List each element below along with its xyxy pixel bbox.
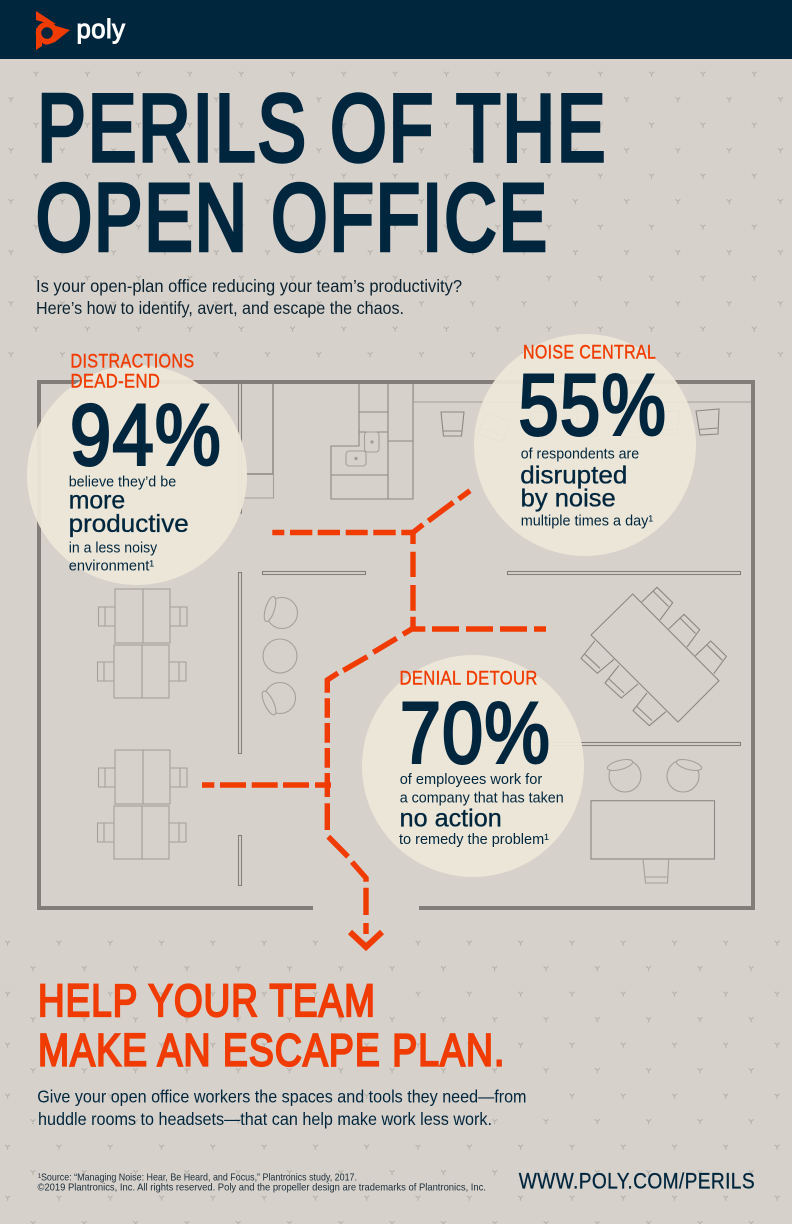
footnote [38,1172,486,1194]
stat 94%: 94% [70,388,222,484]
stat 70%: 70% [400,686,551,782]
title [36,76,608,271]
interior partitions [238,381,740,886]
circle background [362,655,584,877]
heading: DISTRACTIONS [70,350,194,372]
description [399,771,564,848]
title: PERILS OF THE [38,76,608,182]
escape route arrow [202,491,546,947]
description [520,445,653,529]
footnote: ¹Source: “Managing Noise: Hear, Be Heard, and Focus,” Plantronics study, 2017. [38,1172,357,1184]
top row chairs [441,409,719,442]
call to action text [37,1087,526,1129]
header bar with logo [0,0,792,59]
description: of respondents are [521,445,639,462]
description: in a less noisy [69,540,158,557]
logo wordmark: poly [76,14,126,44]
footnote: ©2019 Plantronics, Inc. All rights reserved. Poly and the propeller design are trademarks of Plantronics, Inc. [38,1182,486,1194]
website URL: WWW.POLY.COM/PERILS [519,1168,755,1193]
desk cluster upper [98,589,187,698]
desk and visitor chairs [591,757,714,883]
stat 55%: 55% [518,358,667,454]
panel: distractions dead-end [27,350,247,585]
circle background [27,365,247,585]
heading: DEAD-END [70,371,160,393]
outer walls [39,382,753,908]
call to action text: huddle rooms to headsets—that can help make work less work. [38,1109,492,1129]
kitchen counters [241,384,751,499]
panel: denial detour [362,655,584,877]
desk cluster lower [98,750,187,859]
floor plan [39,381,753,908]
title: OPEN OFFICE [36,165,549,271]
description: of employees work for [400,771,542,788]
heading: DENIAL DETOUR [400,668,538,690]
intro text: Is your open-plan office reducing your team’s productivity? [36,276,462,296]
intro text: Here’s how to identify, avert, and escape the chaos. [36,298,404,318]
panel: noise central [474,334,696,556]
call to action heading [38,975,506,1076]
background pattern: lower [0,930,792,1224]
description: a company that has taken [400,790,564,807]
circle background [474,334,696,556]
heading [70,350,194,393]
description: believe they’d be [69,474,176,491]
intro text [36,276,462,318]
description: productive [69,510,189,538]
description: by noise [521,485,616,513]
heading: NOISE CENTRAL [523,342,656,364]
call to action heading: HELP YOUR TEAM [38,975,376,1026]
icon: Poly propeller mark [36,11,70,50]
description: multiple times a day¹ [521,512,653,529]
call to action heading: MAKE AN ESCAPE PLAN. [38,1025,506,1076]
conference table and chairs [581,587,726,726]
description: disrupted [520,461,627,489]
background pattern: upper [0,61,792,362]
description: more [69,487,125,515]
description: no action [400,805,502,833]
description: to remedy the problem¹ [399,831,549,848]
lounge seating [259,595,298,717]
call to action text: Give your open office workers the spaces and tools they need—from [37,1087,526,1107]
description: environment¹ [69,558,154,575]
description [69,474,189,575]
